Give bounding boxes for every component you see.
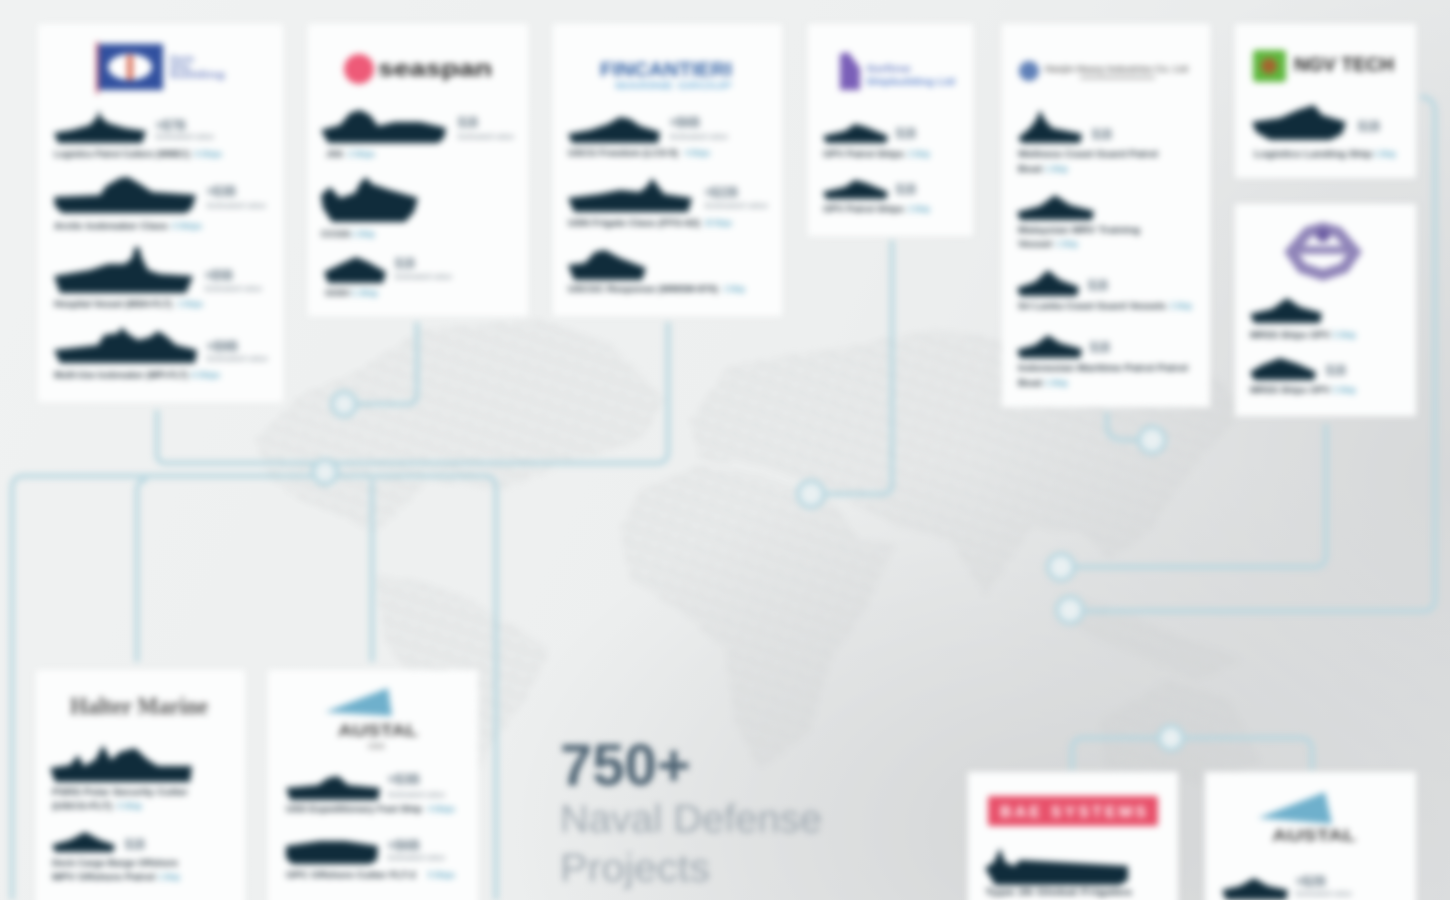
value: Estimated value	[205, 284, 262, 293]
ship	[321, 110, 446, 143]
label: USCG Freedom (LCS-5)	[568, 148, 678, 159]
label	[52, 787, 188, 812]
logo: Austal: AUSTAL	[1272, 826, 1356, 845]
value	[1296, 873, 1352, 898]
panel: Davie	[38, 24, 283, 402]
logo: yard: Hanjin Heavy Industries Co. Ltd	[1045, 64, 1188, 75]
label: 3 Ship	[117, 801, 142, 812]
logo: yard	[1019, 61, 1188, 81]
logo: Fincantieri	[600, 60, 732, 92]
connector: panel six	[1084, 97, 1435, 611]
title: 750+	[560, 733, 691, 798]
value: $1B	[1090, 339, 1110, 356]
label	[326, 149, 375, 160]
label: 20 Ships	[705, 218, 732, 229]
ship	[54, 110, 146, 143]
value: Estimated value	[395, 272, 452, 281]
value	[156, 117, 214, 141]
title	[560, 733, 822, 890]
ship	[568, 117, 660, 143]
value: ≈$3B	[207, 183, 236, 200]
value	[705, 184, 768, 210]
value: Estimated value	[207, 354, 268, 363]
connector: east coast network	[12, 322, 668, 900]
label: 2 Ships	[178, 299, 203, 310]
logo: Seaspan: seaspan	[378, 56, 492, 81]
ship	[568, 178, 692, 212]
location nodes	[313, 392, 1183, 750]
value	[205, 267, 262, 293]
label	[1018, 149, 1158, 175]
label: CCGS	[321, 229, 350, 240]
label	[1018, 363, 1188, 389]
value: Estimated value	[207, 201, 266, 210]
connector: panel four	[825, 240, 892, 494]
ship	[52, 832, 115, 852]
connector: seaspan	[358, 322, 417, 404]
label: 1 Ship	[1045, 378, 1068, 389]
label: USN Frigate Class (FFG-62)	[568, 218, 700, 229]
label: 1 Ship	[158, 872, 180, 883]
value: ≈$6B	[388, 837, 420, 854]
label: USS Expeditionary Fast Ship	[286, 804, 422, 815]
label: (USCG-FLT)	[52, 801, 112, 812]
value: $1B	[896, 181, 916, 198]
label: Vessel	[1018, 239, 1052, 250]
label	[325, 288, 378, 299]
panel: Halter Marine	[36, 670, 245, 900]
value: $1B	[125, 836, 145, 853]
connector: panel five	[1107, 412, 1138, 440]
ship	[568, 250, 646, 280]
ship	[823, 180, 888, 199]
value: $1B	[1088, 277, 1108, 294]
ship	[985, 848, 1128, 885]
value: ≈$5B	[205, 267, 233, 284]
ship	[286, 841, 378, 864]
label: 3 Ships	[172, 221, 202, 232]
label: OOSV	[325, 288, 351, 299]
value: $1B	[395, 255, 415, 272]
panel: Austal USA	[268, 670, 478, 900]
ship	[1017, 335, 1082, 358]
logo: purple yard	[840, 52, 955, 90]
ship	[54, 327, 197, 363]
logo: Seaspan	[344, 54, 492, 84]
value: Estimated value	[705, 201, 768, 210]
value: $1B	[1358, 118, 1380, 135]
label: Logistics Landing Ship	[1254, 149, 1372, 160]
label: 1 Ship	[1056, 239, 1078, 250]
label: Multi-Use Icebreaker (MPI-FLT)	[54, 370, 188, 381]
label: 2 Ship	[1170, 301, 1192, 312]
label: 6 Ships	[195, 149, 222, 160]
logo: NGV Tech: NGV TECH	[1294, 55, 1394, 76]
label: JSS	[326, 149, 343, 160]
label: Sri Lanka Coast Guard Vessels	[1018, 301, 1166, 312]
label: 2 Ship	[908, 204, 930, 215]
label: USCGC Response (WMSM-870)	[568, 284, 718, 295]
panel: Austal Australia	[1205, 772, 1416, 900]
label: 2 Ships	[348, 149, 375, 160]
value	[388, 771, 445, 799]
value: $1B	[1092, 126, 1112, 143]
logo: NGV Tech	[1253, 50, 1394, 82]
panel: BAE Systems	[968, 772, 1178, 900]
ship	[54, 177, 196, 213]
panel: Seaspan	[308, 24, 528, 316]
panel: Korean yard	[1002, 24, 1210, 407]
label: MRSS Ships OPV	[1250, 330, 1331, 341]
label: PSRS Polar Security Cutter	[52, 787, 188, 798]
value	[207, 183, 266, 210]
value: $1B	[1326, 362, 1346, 379]
panel: NGV Tech	[1235, 24, 1416, 178]
value	[458, 114, 514, 141]
value: $1B	[458, 114, 478, 131]
logo: BAE Systems	[988, 796, 1158, 826]
panel: Fincantieri	[553, 24, 782, 316]
label	[321, 229, 375, 240]
connector: bottom right	[1072, 738, 1312, 770]
logo: Fincantieri: MARINE GROUP	[615, 80, 732, 92]
label: Indonesian Maritime Patrol Patrol	[1018, 363, 1188, 374]
logo: Austal: USA	[368, 742, 385, 751]
ship	[324, 257, 386, 283]
logo: emblem	[1291, 228, 1355, 275]
ship	[321, 177, 418, 222]
label: 1 Ship	[1045, 164, 1068, 175]
value: Estimated value	[156, 132, 214, 141]
logo: Austal	[325, 688, 418, 751]
label: Malaysian MRV Training	[1018, 225, 1140, 236]
logo: purple yard: Sefine	[866, 64, 912, 75]
value	[207, 338, 268, 363]
label: 2 Ship	[724, 284, 745, 295]
logo: Halter Marine: Halter Marine	[70, 694, 208, 720]
label: 5 Ships	[428, 870, 455, 881]
ship	[1017, 195, 1094, 220]
ship	[1252, 105, 1346, 140]
label: Wellness Coast Guard Patrol	[1018, 149, 1158, 160]
logo: BAE Systems: BAE SYSTEMS	[1000, 804, 1146, 821]
value: Estimated value	[388, 790, 445, 799]
world map	[255, 320, 1260, 800]
label: MRSS Ships OPV	[1250, 385, 1331, 396]
value	[388, 837, 445, 862]
value: ≈$7B	[156, 117, 186, 134]
label: 2 Ship	[1333, 330, 1356, 341]
value	[670, 114, 728, 141]
value: ≈$2B	[1296, 873, 1326, 890]
label: OPV Patrol Ships	[823, 204, 904, 215]
label: MPV Offshore Patrol	[52, 872, 155, 883]
value: ≈$22B	[705, 184, 738, 201]
logo: flag	[96, 42, 225, 94]
label: Arctic Icebreaker Class	[54, 221, 168, 232]
label: Deck Cargo Barge Offshore	[52, 858, 178, 869]
label: OPC Offshore Cutter FLT-2	[286, 870, 416, 881]
label: Boat	[1018, 378, 1043, 389]
label: 2 Ship	[1333, 385, 1356, 396]
logo: flag: building	[170, 70, 225, 81]
panel: Turkish yard	[808, 24, 973, 236]
ship	[54, 247, 193, 293]
ship	[286, 776, 380, 800]
title: Projects	[560, 847, 710, 890]
label	[52, 858, 180, 883]
value: $1B	[896, 125, 916, 142]
logo: Fincantieri: FINCANTIERI	[600, 60, 732, 81]
ship	[1250, 358, 1316, 380]
ship	[1017, 270, 1079, 296]
label	[1018, 225, 1140, 250]
ship	[1018, 110, 1082, 143]
label: 4 Ships	[428, 804, 455, 815]
value: ≈$9B	[207, 338, 238, 355]
ship	[1222, 878, 1288, 900]
label: Logistics Patrol Cutters (WMEC)	[54, 149, 190, 160]
value: Estimated value	[670, 132, 728, 141]
ship	[823, 124, 888, 143]
value: Estimated value	[458, 132, 514, 141]
panel: purple emblem yard	[1235, 204, 1416, 416]
label: OPV Patrol Ships	[823, 149, 904, 160]
value: Estimated value	[1296, 889, 1352, 898]
value	[395, 255, 452, 281]
logo: flag: Ship	[170, 62, 190, 72]
label: 2 Ship	[908, 149, 930, 160]
title: Naval Defense	[560, 798, 822, 841]
label: Hospital Vessel (MSH-FLT)	[54, 299, 172, 310]
value: ≈$3B	[388, 771, 420, 788]
logo: purple yard: Shipbuilding Ltd	[866, 77, 955, 88]
value: Estimated value	[388, 853, 445, 862]
label: 1 Ship	[352, 288, 378, 299]
logo: Austal	[1258, 792, 1356, 845]
label: Boat	[1018, 164, 1043, 175]
logo: Austal: AUSTAL	[338, 721, 418, 740]
ship	[1250, 298, 1322, 323]
label: 1 Ship	[1374, 149, 1396, 160]
logo: flag: Davie	[170, 54, 194, 64]
label: 6 Ships	[192, 370, 220, 381]
label: Type 26 Global Frigates	[985, 887, 1132, 898]
connector: panel seven	[1075, 424, 1326, 567]
label: 1 Ship	[352, 229, 375, 240]
value: ≈$6B	[670, 114, 700, 131]
ship	[50, 745, 192, 782]
label: 4 Ships	[685, 148, 710, 159]
